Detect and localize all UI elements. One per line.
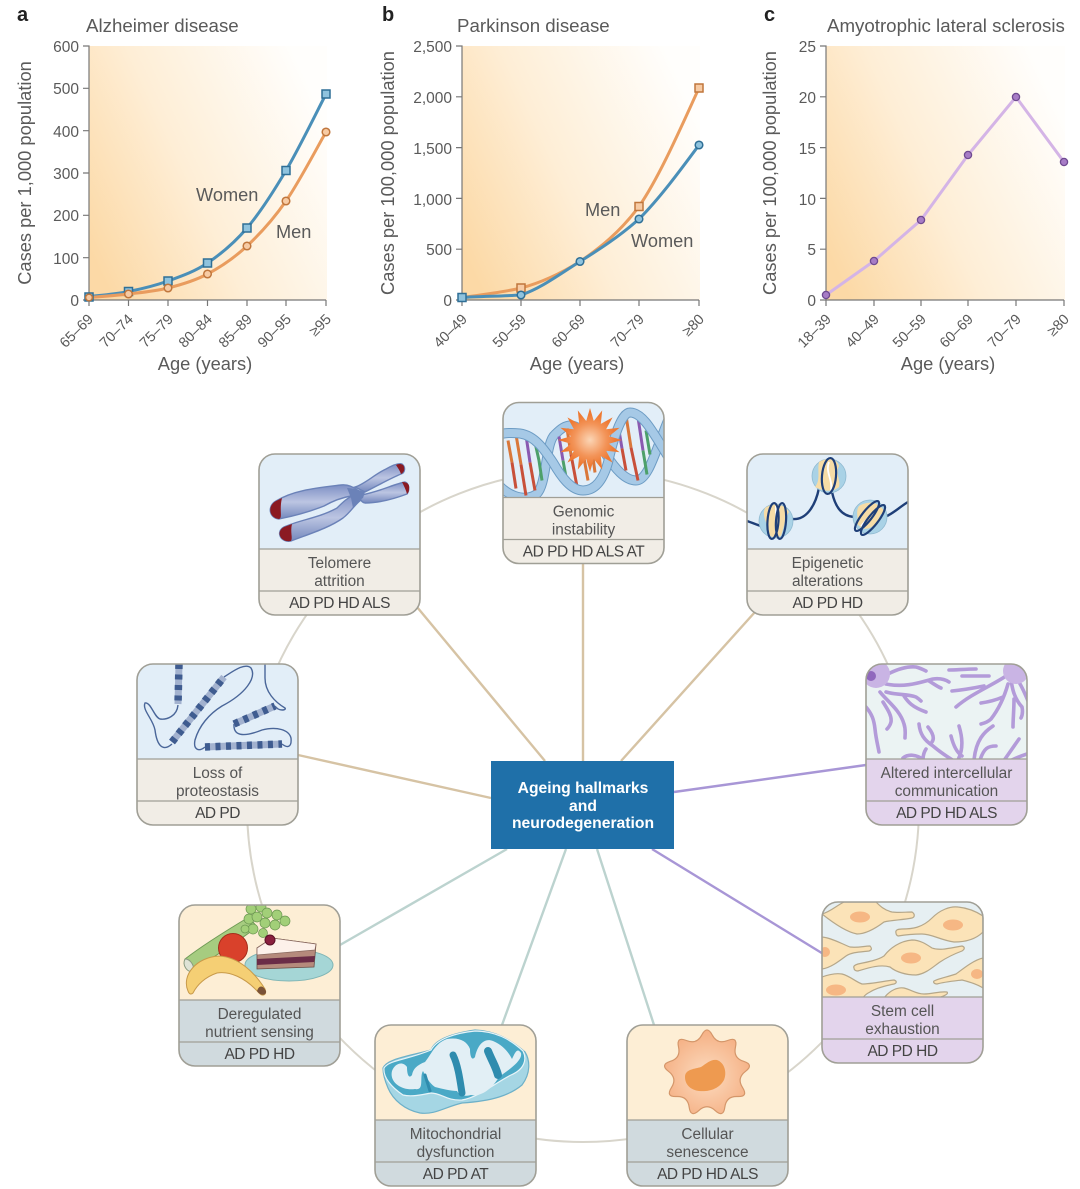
chart b x-axis labels: 70–79 bbox=[608, 312, 648, 351]
label text: Loss of bbox=[193, 765, 243, 782]
icon: protein chains bbox=[144, 664, 291, 750]
chart b y-axis title: Cases per 100,000 population bbox=[377, 51, 398, 295]
chart b y-axis numbers: 0 bbox=[443, 293, 452, 310]
chart c y-axis numbers: 15 bbox=[799, 141, 816, 158]
card: Epigenetic alterations bbox=[747, 454, 908, 615]
chart c x-axis labels: 40–49 bbox=[843, 312, 883, 351]
men line a bbox=[85, 128, 330, 301]
men line b bbox=[462, 84, 703, 298]
label text line 2: dysfunction bbox=[417, 1144, 494, 1161]
chart c x-axis labels: 70–79 bbox=[985, 312, 1025, 351]
chart c y-axis numbers: 25 bbox=[799, 39, 816, 56]
card: Altered intercellular communication bbox=[862, 658, 1029, 825]
chart c y-axis numbers bbox=[799, 39, 816, 310]
chart b y-axis numbers: 500 bbox=[426, 242, 452, 259]
disease list: AD PD HD ALS AT bbox=[523, 544, 645, 560]
chart a x-axis labels: 80–84 bbox=[176, 312, 216, 351]
label text line 2: proteostasis bbox=[176, 783, 259, 800]
chart a y-axis numbers: 200 bbox=[53, 208, 79, 225]
icon: DNA helix with damage star bbox=[493, 408, 668, 498]
chart b y-axis numbers: 2,500 bbox=[413, 39, 452, 56]
chart a x-axis title: Age (years) bbox=[158, 353, 252, 374]
chart a: Alzheimer disease bbox=[14, 4, 335, 374]
chart b x-axis labels bbox=[431, 312, 708, 351]
chart a x-axis labels: 65–69 bbox=[57, 312, 97, 351]
central box: Ageing hallmarks bbox=[518, 780, 649, 797]
panel label a: a bbox=[17, 4, 29, 26]
chart c y-axis title: Cases per 100,000 population bbox=[759, 51, 780, 295]
women label b: Women bbox=[631, 231, 693, 251]
chart c x-axis labels bbox=[795, 312, 1073, 351]
central box: neurodegeneration bbox=[512, 815, 654, 832]
panel label c: c bbox=[764, 4, 775, 26]
chart b: Parkinson disease bbox=[377, 4, 708, 374]
label text: Deregulated bbox=[218, 1006, 301, 1023]
chart c: Amyotrophic lateral sclerosis bbox=[759, 4, 1073, 374]
women line b bbox=[458, 141, 703, 302]
icon: mitochondrion bbox=[383, 1030, 529, 1113]
men label b: Men bbox=[585, 200, 620, 220]
icon: food bbox=[184, 902, 333, 995]
card: Cellular senescence bbox=[627, 1025, 788, 1186]
chart a y-axis title: Cases per 1,000 population bbox=[14, 61, 35, 285]
chart a axes bbox=[83, 46, 326, 306]
chart b y-axis numbers: 1,500 bbox=[413, 141, 452, 158]
chart c x-axis labels: 18–39 bbox=[795, 312, 835, 351]
connecting ring bbox=[247, 470, 919, 1142]
card: Deregulated nutrient sensing bbox=[179, 902, 340, 1066]
label text: Stem cell bbox=[871, 1003, 934, 1020]
label text: Telomere bbox=[308, 555, 371, 572]
ALS line c bbox=[822, 93, 1068, 299]
icon: neurons bbox=[866, 664, 1026, 758]
label text line 2: attrition bbox=[314, 573, 365, 590]
central box: and bbox=[569, 798, 597, 815]
disease list: AD PD HD ALS bbox=[289, 595, 390, 612]
chart a title: Alzheimer disease bbox=[86, 15, 239, 36]
chart c y-axis numbers: 0 bbox=[807, 293, 816, 310]
label text line 2: exhaustion bbox=[865, 1021, 940, 1038]
label text: Genomic bbox=[553, 504, 615, 520]
chart c axes bbox=[820, 46, 1064, 306]
chart c y-axis numbers: 20 bbox=[799, 90, 816, 107]
chart a plot background bbox=[89, 46, 327, 300]
label text line 2: alterations bbox=[792, 573, 863, 590]
chart b x-axis labels: 60–69 bbox=[549, 312, 589, 351]
chart c x-axis labels: ≥80 bbox=[1044, 312, 1073, 340]
chart c x-axis labels: 60–69 bbox=[937, 312, 977, 351]
label text: Cellular bbox=[681, 1126, 734, 1143]
disease list: AD PD HD bbox=[792, 595, 863, 612]
icon: stem cells bbox=[820, 902, 983, 998]
chart a y-axis numbers: 600 bbox=[53, 39, 79, 56]
icon: nucleosomes on DNA bbox=[747, 457, 908, 539]
chart c x-axis title: Age (years) bbox=[901, 353, 995, 374]
chart b y-axis numbers bbox=[413, 39, 452, 310]
chart b x-axis title: Age (years) bbox=[530, 353, 624, 374]
disease list: AD PD HD ALS bbox=[896, 805, 997, 822]
chart b axes bbox=[456, 46, 699, 306]
chart c plot background bbox=[826, 46, 1065, 300]
card: Stem cell exhaustion bbox=[820, 902, 983, 1063]
chart a y-axis numbers: 400 bbox=[53, 124, 79, 141]
label text line 2: communication bbox=[895, 783, 998, 800]
label text: Epigenetic bbox=[792, 555, 864, 572]
chart b x-axis labels: ≥80 bbox=[679, 312, 708, 340]
label text line 2: senescence bbox=[666, 1144, 749, 1161]
label text line 2: nutrient sensing bbox=[205, 1024, 314, 1041]
chart a y-axis numbers: 0 bbox=[70, 293, 79, 310]
panel label b: b bbox=[382, 4, 394, 26]
card: Mitochondrial dysfunction bbox=[375, 1025, 536, 1186]
card: Loss of proteostasis bbox=[137, 664, 298, 825]
chart a x-axis labels: 70–74 bbox=[97, 312, 137, 351]
label text: Altered intercellular bbox=[881, 765, 1012, 782]
disease list: AD PD HD bbox=[224, 1046, 295, 1063]
card: Telomere attrition bbox=[259, 454, 420, 615]
chart c title: Amyotrophic lateral sclerosis bbox=[827, 15, 1065, 36]
disease list: AD PD bbox=[195, 805, 240, 822]
chart a x-axis labels: 90–95 bbox=[255, 312, 295, 351]
chart c y-axis numbers: 10 bbox=[799, 192, 816, 209]
disease list: AD PD HD ALS bbox=[657, 1166, 758, 1183]
chart b x-axis labels: 50–59 bbox=[490, 312, 530, 351]
card: Genomic instability bbox=[493, 402, 668, 564]
chart a y-axis numbers: 300 bbox=[53, 166, 79, 183]
chart a x-axis labels: 75–79 bbox=[137, 312, 177, 351]
men label a: Men bbox=[276, 222, 311, 242]
label text: Mitochondrial bbox=[410, 1126, 501, 1143]
icon: chromosome bbox=[270, 464, 409, 541]
chart a x-axis labels bbox=[57, 312, 335, 351]
chart a x-axis labels: ≥95 bbox=[306, 312, 335, 340]
chart b y-axis numbers: 2,000 bbox=[413, 90, 452, 107]
women label a: Women bbox=[196, 185, 258, 205]
chart b x-axis labels: 40–49 bbox=[431, 312, 471, 351]
chart b title: Parkinson disease bbox=[457, 15, 610, 36]
chart a y-axis numbers bbox=[53, 39, 79, 310]
disease list: AD PD AT bbox=[423, 1166, 489, 1183]
chart b y-axis numbers: 1,000 bbox=[413, 192, 452, 209]
chart a y-axis numbers: 100 bbox=[53, 251, 79, 268]
central box bbox=[491, 761, 674, 849]
label text line 2: instability bbox=[552, 522, 615, 538]
icon: senescent cell bbox=[665, 1030, 749, 1114]
women line a bbox=[89, 90, 330, 297]
disease list: AD PD HD bbox=[867, 1043, 938, 1060]
chart a x-axis labels: 85–89 bbox=[216, 312, 256, 351]
chart a y-axis numbers: 500 bbox=[53, 81, 79, 98]
spokes to central box bbox=[298, 563, 866, 1025]
chart c y-axis numbers: 5 bbox=[807, 242, 816, 259]
chart b plot background bbox=[462, 46, 700, 300]
chart c x-axis labels: 50–59 bbox=[890, 312, 930, 351]
